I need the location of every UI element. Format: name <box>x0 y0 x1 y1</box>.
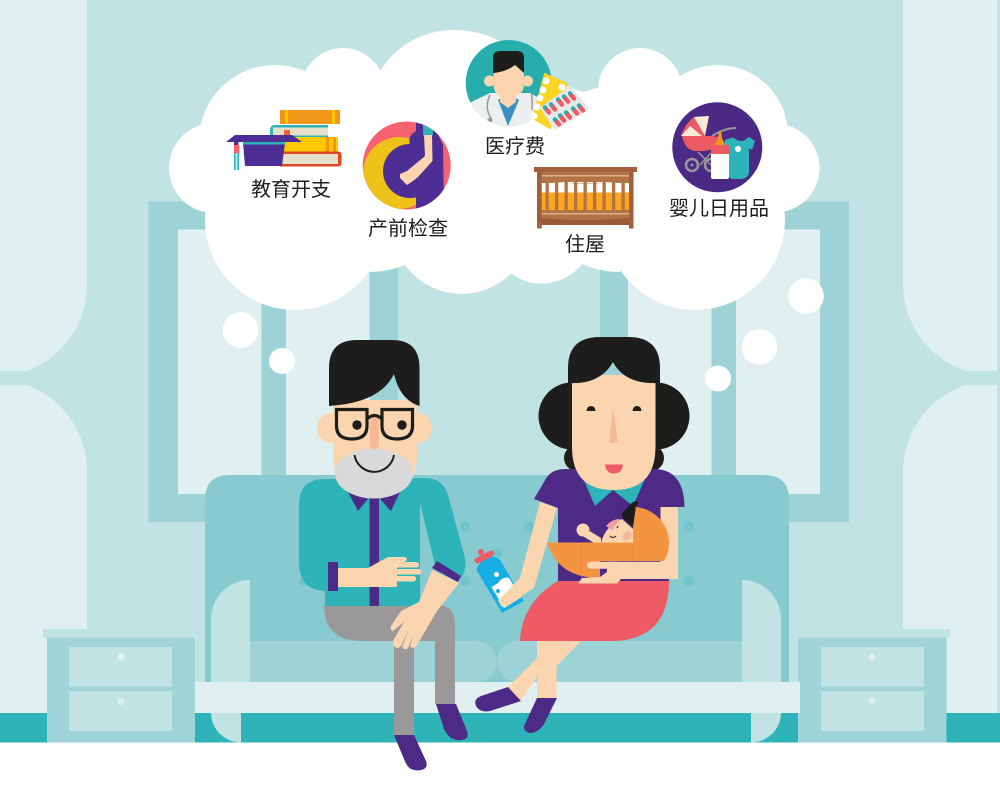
woman: nose <box>609 408 618 443</box>
woman: legs <box>508 640 582 701</box>
man: ears <box>317 413 432 443</box>
man: face <box>333 400 417 497</box>
left curtain <box>0 0 87 713</box>
woman: mouth <box>605 464 623 474</box>
man: beard <box>335 448 413 498</box>
icon: pregnant woman <box>363 120 451 211</box>
thought bubbles <box>223 278 824 392</box>
label: medical costs: 医疗费 <box>485 135 545 158</box>
floor band <box>0 713 1000 742</box>
man: smile <box>354 455 394 472</box>
man <box>299 340 468 770</box>
woman: shoes <box>475 687 557 733</box>
sofa <box>195 475 800 742</box>
woman: face <box>572 375 656 490</box>
woman: left arm <box>498 502 557 607</box>
woman: hair back <box>538 382 690 471</box>
woman: hair top <box>568 337 660 383</box>
man: nose <box>370 415 379 449</box>
man: resting arm and hand <box>338 557 422 587</box>
label: education: 教育开支 <box>251 178 331 201</box>
icon: baby goods <box>672 102 762 192</box>
right nightstand <box>798 629 950 742</box>
woman: forearm and hand <box>578 562 678 584</box>
woman: eyes <box>586 406 642 411</box>
man: cuffs <box>328 561 461 591</box>
man: placket and collar <box>347 490 401 606</box>
icon: doctor and pills <box>465 40 587 130</box>
woman: skirt <box>520 581 669 641</box>
woman <box>475 337 690 733</box>
man: shirt <box>299 478 466 606</box>
woman: right arm <box>660 507 678 579</box>
man: pupils <box>352 420 407 430</box>
man: pants <box>324 605 455 735</box>
man: hair <box>329 340 420 406</box>
left nightstand <box>43 629 195 742</box>
man: arm and hand on knee <box>391 570 459 649</box>
baby in bassinet <box>547 501 669 578</box>
woman: blouse <box>534 469 684 581</box>
label: prenatal checks: 产前检查 <box>368 217 448 240</box>
thought cloud <box>169 30 820 310</box>
man: glasses <box>336 410 412 439</box>
icon: crib <box>534 167 637 228</box>
label: baby supplies: 婴儿日用品 <box>669 198 769 220</box>
label: housing: 住屋 <box>565 233 605 256</box>
mother's fingers on bottle <box>504 593 522 607</box>
window <box>148 202 849 522</box>
baby bottle <box>476 549 524 613</box>
man: shoes <box>394 704 468 770</box>
woman: collar <box>579 469 648 506</box>
icon: books and graduation cap <box>226 110 342 170</box>
right curtain <box>903 0 997 713</box>
